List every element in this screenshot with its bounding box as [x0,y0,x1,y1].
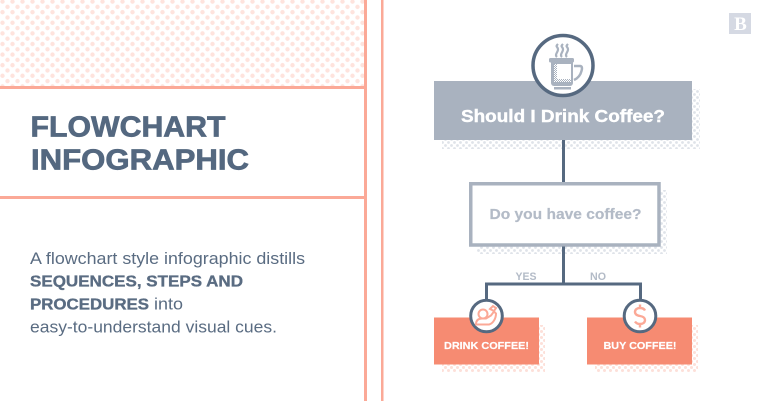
box: do you have coffee: Do you have coffee? [490,206,642,223]
vertical divider lines [364,0,384,401]
description text: SEQUENCES, STEPS AND [30,274,243,291]
icon: coffee cup [533,36,593,96]
panel: dotted header band [0,0,364,86]
icon: dollar sign [624,300,656,332]
branch label: no: NO [590,271,606,283]
description text: easy-to-understand visual cues. [30,319,277,337]
description text [30,250,305,337]
box: do you have coffee [471,184,667,254]
description text: into [154,296,183,314]
title: INFOGRAPHIC [31,145,249,177]
description text: A flowchart style infographic distills [30,250,305,268]
icon: person drinking [471,300,502,332]
box: drink coffee [434,318,545,372]
box: buy coffee [587,318,698,372]
box: should I drink coffee: Should I Drink Coffee? [461,106,665,126]
connector lines [486,140,640,300]
box: buy coffee: BUY COFFEE! [604,340,676,352]
box: drink coffee: DRINK COFFEE! [444,340,529,352]
logo badge: B [734,14,747,35]
box: should I drink coffee [434,81,700,149]
title [30,112,249,177]
branch label: yes: YES [516,271,536,283]
logo badge [729,13,751,35]
description text: PROCEDURES [30,296,149,314]
title: FLOWCHART [30,112,226,144]
left panel horizontal rules [0,86,364,199]
